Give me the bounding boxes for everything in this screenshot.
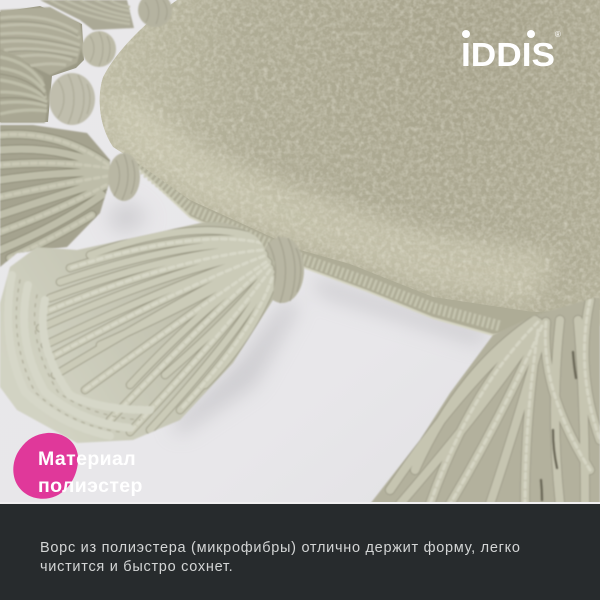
tassel: upper left bbox=[0, 7, 116, 75]
tassel: large left bbox=[0, 125, 140, 267]
label: material: Материал bbox=[38, 448, 136, 470]
logo: IDDIS: ® bbox=[555, 30, 561, 39]
footer description: Ворс из полиэстера (микрофибры) отлично держит форму, легко bbox=[40, 540, 521, 556]
frayed fringe bbox=[8, 275, 150, 436]
strand twist highlights bbox=[430, 300, 600, 504]
label: material bbox=[38, 448, 143, 497]
footer band bbox=[0, 504, 600, 600]
rug pile surface bbox=[100, 0, 600, 312]
footer description: чистится и быстро сохнет. bbox=[40, 559, 233, 575]
rug binding edge bbox=[125, 150, 600, 335]
strand shadows bbox=[40, 230, 272, 432]
ball bbox=[108, 153, 140, 201]
tassel: large front bbox=[0, 222, 304, 443]
strand shadows bbox=[390, 300, 600, 504]
tassel: bottom right bbox=[370, 298, 600, 504]
ball bbox=[82, 31, 116, 67]
surface edge line bbox=[0, 502, 600, 504]
footer description bbox=[40, 540, 521, 575]
strands bbox=[40, 230, 272, 432]
tassel backing shadow bbox=[0, 6, 84, 122]
dark gaps bbox=[541, 352, 576, 500]
strand twist highlights bbox=[45, 239, 272, 432]
ball bbox=[49, 73, 95, 125]
tassel: middle left bbox=[0, 50, 95, 125]
tassel shadows on surface bbox=[105, 200, 490, 435]
pink blob bbox=[13, 433, 78, 499]
logo: IDDIS: IDDIS bbox=[461, 36, 555, 73]
ball bbox=[260, 237, 304, 303]
yarn body bbox=[0, 222, 275, 443]
strands bbox=[390, 300, 600, 504]
tassel: top bbox=[40, 0, 172, 30]
label: material: полиэстер bbox=[38, 475, 143, 497]
